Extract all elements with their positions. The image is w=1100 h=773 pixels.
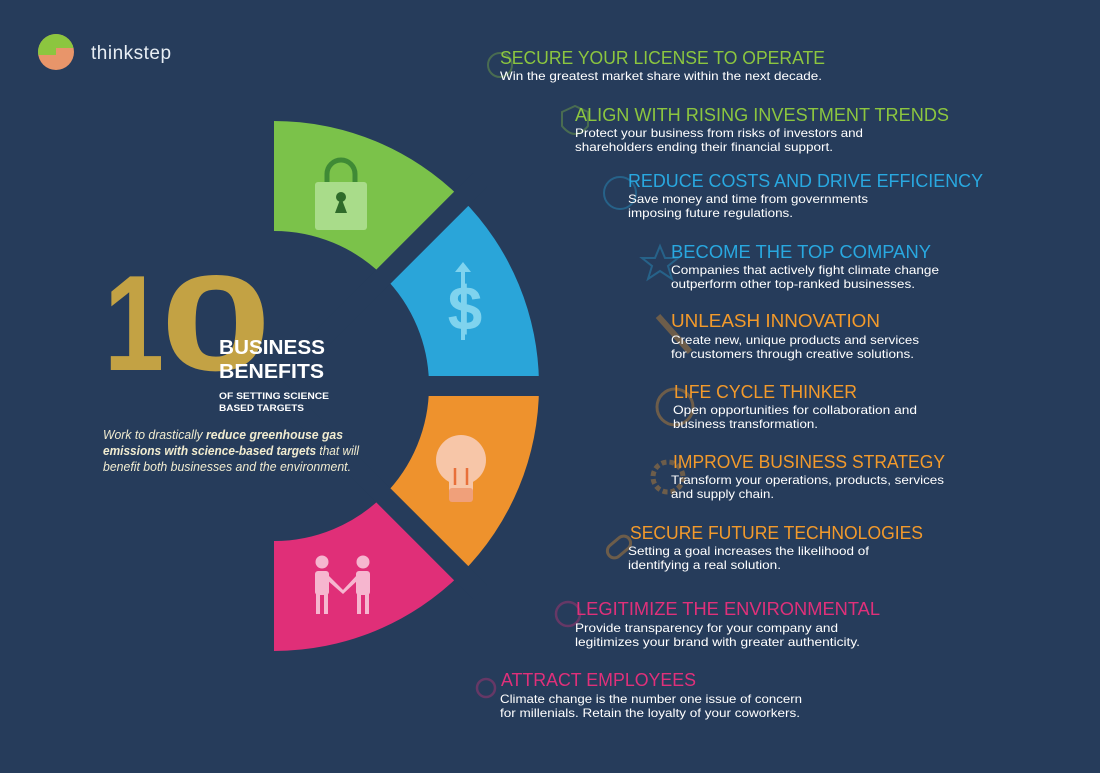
big number 10 (104, 247, 272, 399)
logo: thinkstep (91, 43, 172, 64)
benefit 1 (488, 48, 825, 83)
benefit 3 (604, 171, 983, 220)
intro paragraph (103, 428, 360, 474)
intro paragraph: benefit both businesses and the environment. (103, 460, 351, 474)
benefit 8: SECURE FUTURE TECHNOLOGIES (630, 523, 923, 543)
big number 10: 0 (160, 247, 272, 399)
semicircle chart (274, 121, 560, 651)
benefit 3: REDUCE COSTS AND DRIVE EFFICIENCY (628, 171, 983, 191)
benefit 5: for customers through creative solutions. (671, 347, 914, 361)
benefit 7: Transform your operations, products, services (671, 473, 944, 487)
title: business benefits: BASED TARGETS (219, 403, 304, 413)
benefit 5: UNLEASH INNOVATION (671, 311, 880, 331)
benefit 4: BECOME THE TOP COMPANY (671, 242, 931, 262)
benefit 10: ATTRACT EMPLOYEES (501, 670, 696, 690)
benefit 4 (642, 242, 939, 291)
segment: green lock (274, 121, 461, 276)
benefit 2: Protect your business from risks of investors and (575, 126, 863, 140)
intro paragraph: Work to drastically reduce greenhouse gas (103, 428, 343, 442)
benefit 8: Setting a goal increases the likelihood of (628, 544, 870, 558)
segment: blue dollar (384, 199, 539, 386)
benefit 6: LIFE CYCLE THINKER (674, 382, 857, 402)
benefit 7: IMPROVE BUSINESS STRATEGY (673, 452, 945, 472)
benefit 3: Save money and time from governments (628, 192, 868, 206)
benefit 9: LEGITIMIZE THE ENVIRONMENTAL (576, 599, 880, 619)
benefit 6 (657, 382, 917, 431)
benefit 5 (658, 311, 919, 361)
benefit 5: Create new, unique products and services (671, 333, 919, 347)
title: business benefits: BENEFITS (219, 361, 324, 383)
benefit 2: ALIGN WITH RISING INVESTMENT TRENDS (575, 105, 949, 125)
gaps (274, 180, 560, 592)
segment: orange bulb (384, 386, 539, 573)
benefit 8 (605, 523, 923, 572)
benefit 6: business transformation. (673, 417, 818, 431)
benefit 8: identifying a real solution. (628, 558, 781, 572)
segment: pink people (274, 496, 461, 651)
logo (38, 34, 172, 70)
benefit 3: imposing future regulations. (628, 206, 793, 220)
benefit 9 (556, 599, 880, 649)
benefit 1: Win the greatest market share within the next decade. (500, 69, 822, 83)
title: business benefits: BUSINESS (219, 337, 325, 359)
title: business benefits (219, 337, 329, 413)
benefit 6: Open opportunities for collaboration and (673, 403, 917, 417)
segment: blue dollar: $ (448, 275, 482, 344)
benefit 4: outperform other top-ranked businesses. (671, 277, 915, 291)
benefit 10: Climate change is the number one issue of concern (500, 692, 802, 706)
benefit 9: Provide transparency for your company and (575, 621, 838, 635)
big number 10: 1 (104, 247, 164, 399)
benefit 1: SECURE YOUR LICENSE TO OPERATE (500, 48, 825, 68)
benefit 2 (562, 105, 949, 154)
benefit 2: shareholders ending their financial support. (575, 140, 833, 154)
benefit 10: for millenials. Retain the loyalty of your coworkers. (500, 706, 800, 720)
benefit 7 (653, 452, 945, 501)
title: business benefits: OF SETTING SCIENCE (219, 391, 329, 401)
intro paragraph: emissions with science-based targets that will (103, 444, 360, 458)
benefit 4: Companies that actively fight climate change (671, 263, 939, 277)
benefit 10 (477, 670, 802, 720)
benefit 7: and supply chain. (671, 487, 774, 501)
benefit 9: legitimizes your brand with greater authenticity. (575, 635, 860, 649)
